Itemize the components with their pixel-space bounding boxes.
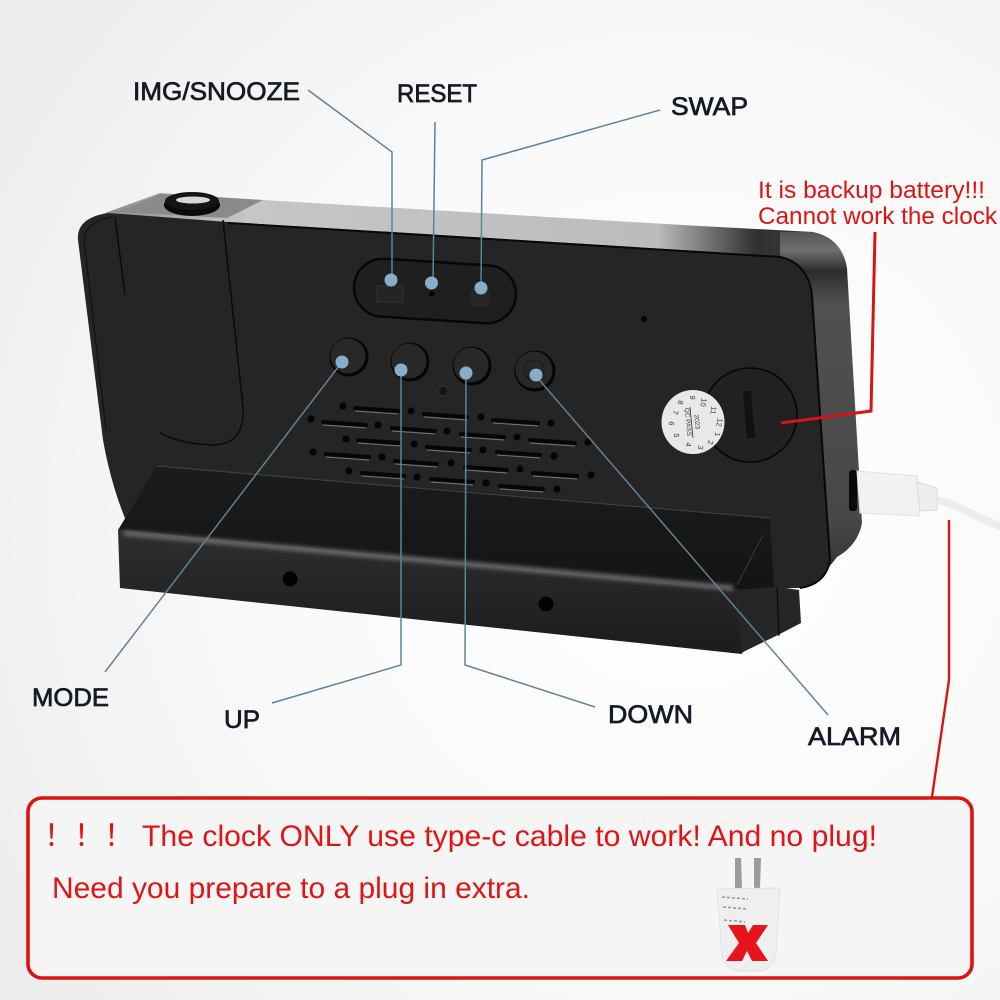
label: ALARM: ALARM bbox=[808, 723, 901, 751]
label: RESET: RESET bbox=[397, 80, 477, 108]
QC sticker: 7 bbox=[671, 410, 680, 415]
leader line: SWAP bbox=[474, 110, 660, 294]
label: MODE: MODE bbox=[32, 684, 109, 712]
USB-C cable bbox=[857, 471, 1000, 528]
up button bbox=[390, 342, 430, 382]
leader line: RESET bbox=[425, 122, 438, 290]
battery cover bbox=[703, 368, 797, 462]
leader line: ALARM bbox=[530, 368, 828, 715]
reset hole bbox=[429, 291, 435, 297]
QC sticker: 8 bbox=[676, 400, 685, 405]
callout text: ！！！ bbox=[44, 820, 134, 853]
label: UP: UP bbox=[224, 706, 260, 734]
callout text bbox=[44, 820, 877, 905]
QC sticker: QC PASS bbox=[683, 407, 692, 437]
arrow: cable callout line bbox=[932, 520, 949, 797]
QC sticker bbox=[662, 390, 725, 454]
QC sticker: 4 bbox=[684, 442, 693, 447]
QC sticker: 12 bbox=[714, 418, 725, 427]
mode button bbox=[330, 338, 368, 376]
leader line: MODE bbox=[105, 356, 348, 672]
callout text: The clock ONLY use type-c cable to work! And no plug! bbox=[142, 820, 877, 853]
QC sticker: 5 bbox=[672, 433, 681, 438]
projector arm bbox=[115, 217, 243, 445]
label: DOWN: DOWN bbox=[608, 701, 693, 729]
leader line: IMG/SNOOZE bbox=[308, 90, 398, 286]
QC sticker: 11 bbox=[708, 406, 719, 415]
speaker grille bbox=[307, 402, 595, 493]
label: IMG/SNOOZE: IMG/SNOOZE bbox=[133, 78, 300, 106]
clock device bbox=[78, 192, 862, 654]
microphone hole bbox=[641, 316, 647, 322]
screw hole bbox=[438, 386, 448, 396]
battery note: It is backup battery!!! bbox=[758, 177, 985, 204]
button panel bbox=[352, 257, 518, 325]
leader line: UP bbox=[272, 364, 408, 703]
battery slot bbox=[743, 391, 755, 438]
top surface bbox=[105, 193, 813, 262]
arrow: battery callout line bbox=[781, 232, 875, 423]
battery note: Cannot work the clock bbox=[758, 203, 998, 230]
projector lens bbox=[164, 192, 220, 216]
rear panel bbox=[78, 213, 830, 588]
base front face bbox=[118, 530, 742, 654]
alarm button bbox=[514, 350, 556, 392]
label: SWAP: SWAP bbox=[671, 93, 748, 121]
QC sticker: 9 bbox=[688, 395, 697, 400]
down button bbox=[452, 346, 492, 386]
stand base bbox=[118, 466, 801, 654]
QC sticker: 10 bbox=[698, 398, 709, 407]
icon: plug with red X bbox=[717, 858, 780, 971]
QC sticker: 3 bbox=[696, 445, 705, 450]
leader line: DOWN bbox=[460, 366, 595, 707]
swap button bbox=[468, 285, 492, 309]
QC sticker: 2023 bbox=[692, 414, 701, 430]
battery note bbox=[758, 177, 998, 230]
img snooze switch bbox=[377, 286, 403, 302]
side panel bbox=[780, 232, 862, 588]
QC sticker: 2 bbox=[706, 440, 715, 445]
callout text: Need you prepare to a plug in extra. bbox=[52, 872, 530, 905]
base slanted face bbox=[118, 466, 774, 590]
base foot bbox=[735, 586, 801, 653]
QC sticker: 1 bbox=[713, 432, 722, 437]
QC sticker: 6 bbox=[667, 421, 676, 426]
callout box bbox=[28, 798, 972, 978]
USB port bbox=[849, 470, 857, 511]
